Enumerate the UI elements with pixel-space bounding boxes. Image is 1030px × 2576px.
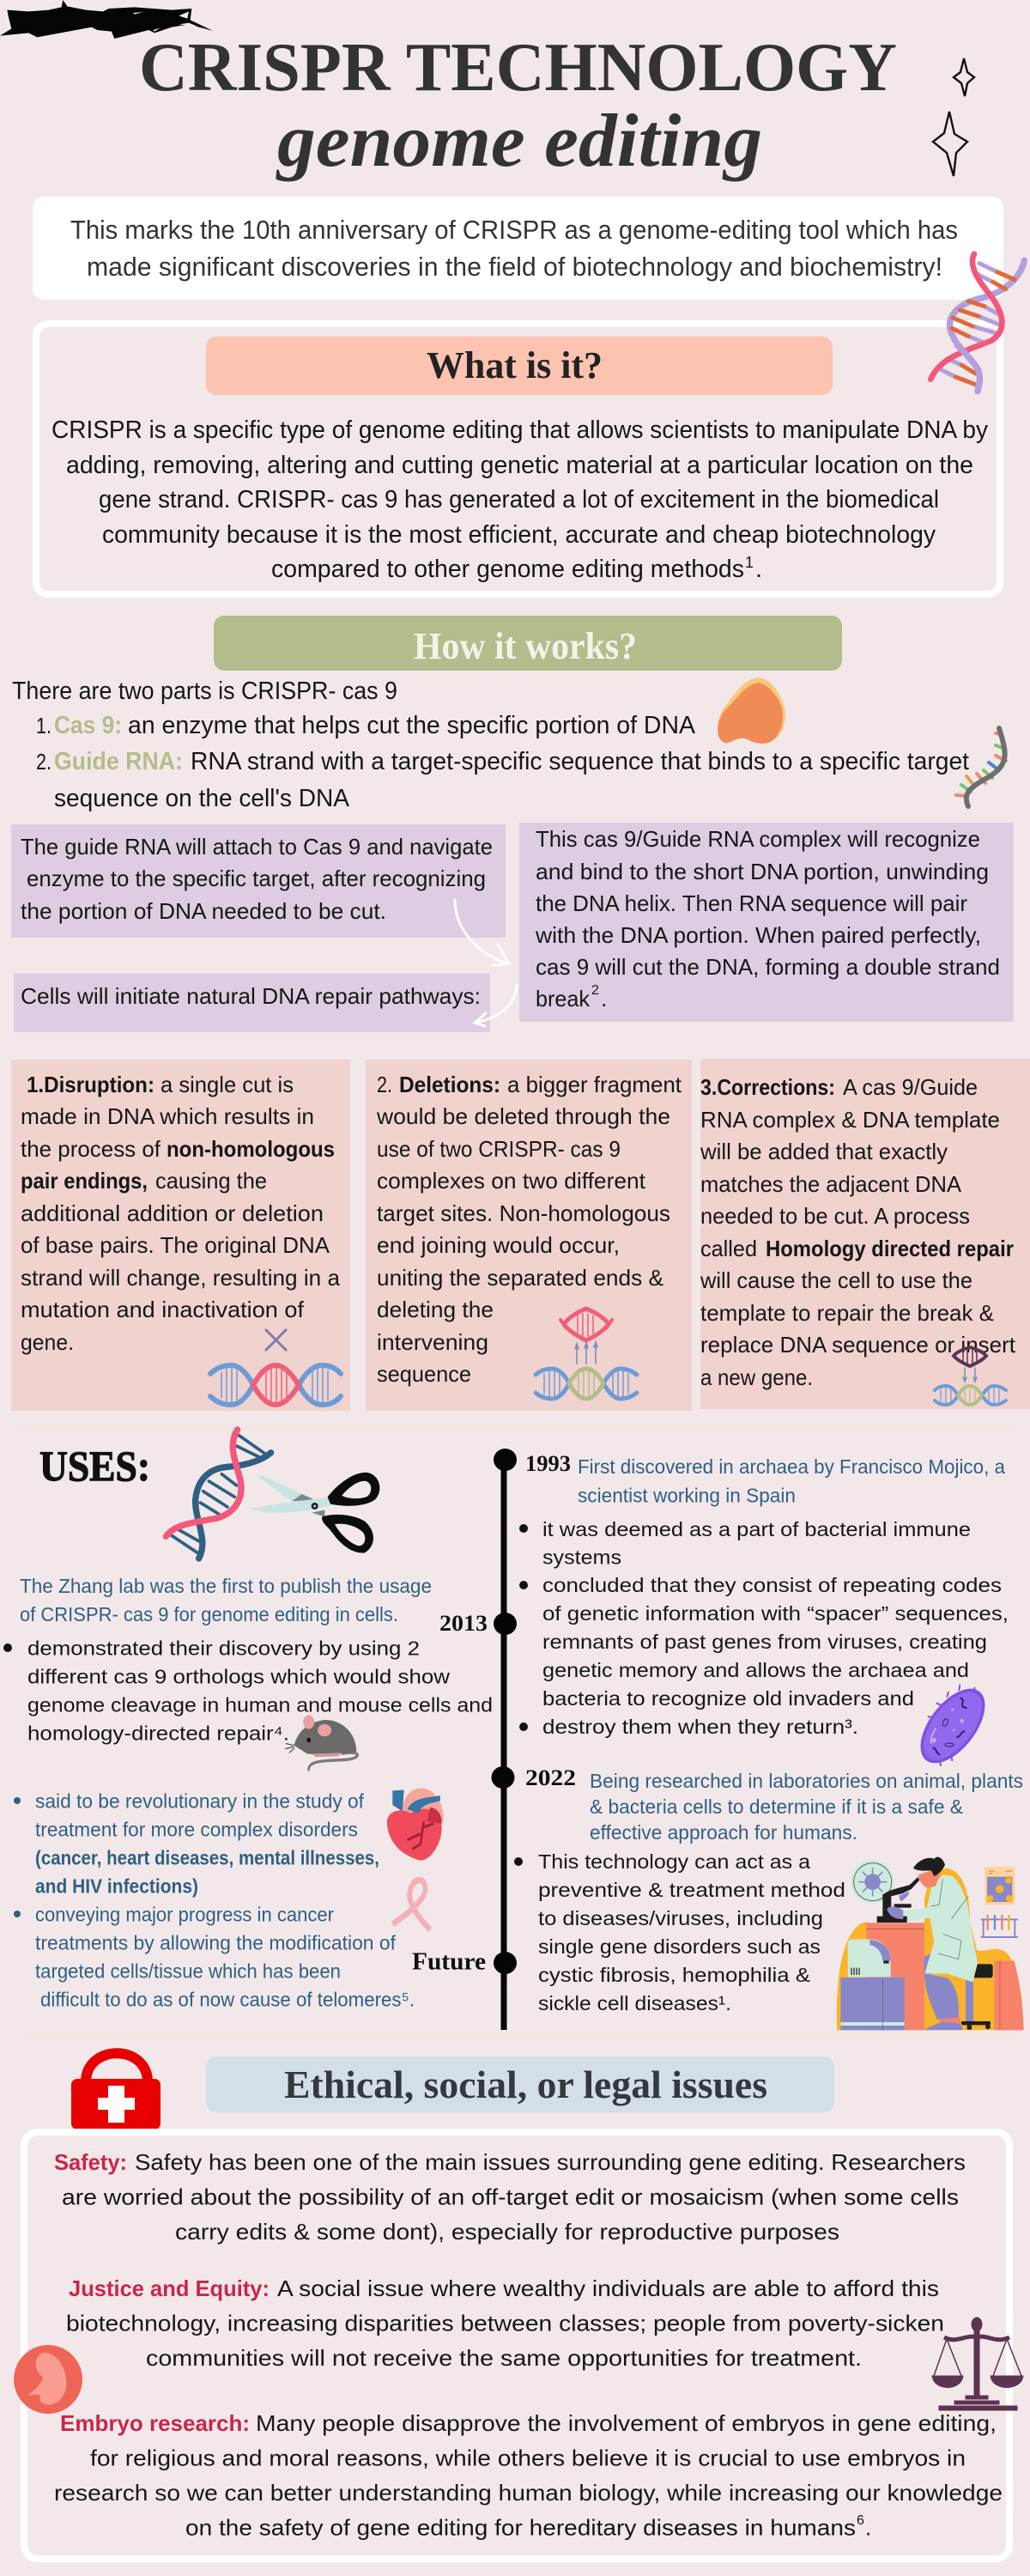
heading: how it works: How it works? xyxy=(414,625,637,667)
icon: Cas 9 enzyme blob xyxy=(718,677,785,744)
icon: scissors xyxy=(249,1473,379,1553)
text block: two parts: 2. xyxy=(36,749,52,775)
text block: disruption: strand will change, resulting in a xyxy=(21,1265,341,1291)
text block: 2022 bullet: single gene disorders such as xyxy=(538,1935,821,1958)
text block: embryo research: Embryo research: xyxy=(60,2410,250,2436)
text block: deletions: uniting the separated ends & xyxy=(377,1265,663,1291)
panel: deletions xyxy=(366,1060,692,1411)
text block: definition: CRISPR is a specific type of genome editing that allows scientists to manipulate DNA by xyxy=(52,416,988,444)
text block: complex disorders: (cancer, heart diseases, mental illnesses, xyxy=(35,1846,379,1868)
icon: mouse xyxy=(285,1715,358,1771)
text block: 1993 discovery: scientist working in Spain xyxy=(578,1484,796,1506)
icon: DNA fragment removal xyxy=(536,1309,637,1399)
text block: Zhang lab: The Zhang lab was the first to publish the usage xyxy=(20,1575,432,1597)
text block: definition: 1 xyxy=(745,554,754,571)
panel: complex recognition step: and bind to the short DNA portion, unwinding xyxy=(536,859,989,884)
text block: justice and equity: communities will not receive the same opportunities for treatment. xyxy=(146,2345,862,2371)
icon: DNA insertion xyxy=(935,1347,1006,1405)
text block: 2013 discovery xyxy=(3,1637,493,1745)
icon: heart xyxy=(387,1788,444,1861)
text block: disruption: made in DNA which results in xyxy=(21,1103,314,1129)
text block: safety xyxy=(54,2149,966,2245)
text block: disruption: pair endings, xyxy=(21,1168,148,1194)
label: future: Future xyxy=(412,1949,486,1975)
text block: corrections: matches the adjacent DNA xyxy=(700,1171,962,1197)
icon: scales of justice xyxy=(932,2318,1023,2410)
text block: two parts: 1. xyxy=(36,713,52,738)
text block: two parts: There are two parts is CRISPR- cas 9 xyxy=(12,677,397,705)
arrow: complex to repair xyxy=(475,985,517,1026)
text block: 2022 research: effective approach for humans. xyxy=(590,1821,857,1844)
panel: guide RNA step: enzyme to the specific target, after recognizing xyxy=(27,866,486,891)
text block: 1993 bullets: systems xyxy=(542,1546,621,1568)
text block: 2022 bullet xyxy=(514,1850,845,2014)
text block: embryo research: research so we can better understanding human biology, while increasing our knowledge xyxy=(54,2480,1003,2506)
text block: 2022 bullet: preventive & treatment method xyxy=(538,1879,845,1901)
icon: bacterium xyxy=(908,1678,997,1774)
text block: corrections: a new gene. xyxy=(700,1364,813,1390)
text block: 1993 bullets xyxy=(519,1518,1009,1738)
text block: two parts: Cas 9: xyxy=(54,712,122,739)
panel: repair pathways step xyxy=(14,974,490,1032)
icon: pink and purple DNA xyxy=(930,254,1024,392)
text block: 2022 bullet: sickle cell diseases¹. xyxy=(538,1992,731,2014)
text block: two parts: sequence on the cell's DNA xyxy=(54,785,350,812)
text block: definition: . xyxy=(755,556,762,583)
text block: deletions: Deletions: xyxy=(399,1072,500,1097)
panel: guide RNA step: the portion of DNA needed to be cut. xyxy=(21,898,386,924)
icon: DNA strand xyxy=(166,1430,271,1558)
panel: complex recognition step: the DNA helix. Then RNA sequence will pair xyxy=(536,890,967,916)
arrow: guide RNA to complex xyxy=(455,900,509,965)
text block: corrections: replace DNA sequence or insert xyxy=(700,1332,1016,1358)
text block: corrections: 3.Corrections: xyxy=(700,1074,835,1100)
text block: safety: Safety: xyxy=(54,2149,127,2175)
text block: 1993 discovery: First discovered in archaea by Francisco Mojico, a xyxy=(578,1455,1005,1478)
panel: complex recognition step xyxy=(519,823,1014,1022)
text block: corrections: needed to be cut. A process xyxy=(700,1203,970,1229)
panel: complex recognition step: with the DNA portion. When paired perfectly, xyxy=(535,922,981,948)
text block: 1993 bullets: it was deemed as a part of bacterial immune xyxy=(542,1518,971,1540)
title: CRISPR TECHNOLOGY xyxy=(139,30,897,106)
text block: complex disorders: said to be revolutionary in the study of xyxy=(35,1789,365,1812)
text block: deletions: intervening xyxy=(377,1329,488,1355)
text block: 2022 research xyxy=(590,1770,1023,1844)
text block: safety: Safety has been one of the main issues surrounding gene editing. Researchers xyxy=(135,2149,966,2175)
heading: uses: USES: xyxy=(39,1442,150,1490)
icon: awareness ribbon xyxy=(392,1880,430,1929)
text block: justice and equity: Justice and Equity: xyxy=(69,2275,270,2301)
panel: complex recognition step: break xyxy=(536,986,591,1012)
text block: definition: gene strand. CRISPR- cas 9 has generated a lot of excitement in the biomedical xyxy=(99,486,939,513)
text block: safety: are worried about the possibility of an off-target edit or mosaicism (when some cells xyxy=(62,2184,959,2210)
text block: deletions: use of two CRISPR- cas 9 xyxy=(377,1136,621,1162)
text block: definition: adding, removing, altering and cutting genetic material at a particular location on the xyxy=(66,452,973,479)
text block: deletions: deleting the xyxy=(377,1297,494,1322)
text block: justice and equity: A social issue where wealthy individuals are able to afford this xyxy=(277,2275,939,2301)
text block: disruption: the process of xyxy=(21,1136,161,1162)
panel: corrections xyxy=(700,1059,1030,1409)
panel: complex recognition step: This cas 9/Guide RNA complex will recognize xyxy=(536,826,980,852)
text block: deletions: 2. xyxy=(377,1072,392,1097)
text block: deletions xyxy=(376,1072,682,1387)
chart: timeline xyxy=(412,1449,576,2030)
text block: deletions: end joining would occur, xyxy=(377,1232,620,1258)
text block: definition: compared to other genome editing methods xyxy=(271,556,744,583)
text block: deletions: sequence xyxy=(377,1361,471,1387)
text block: 1993 discovery xyxy=(578,1455,1005,1506)
text block: disruption: of base pairs. The original DNA xyxy=(21,1232,330,1258)
panel: repair pathways step: Cells will initiate natural DNA repair pathways: xyxy=(21,983,481,1009)
text block: corrections: Homology directed repair xyxy=(766,1236,1014,1261)
text block: 2013 discovery: homology-directed repair⁴. xyxy=(27,1722,289,1745)
redacted scribble xyxy=(0,0,213,39)
text block: embryo research: 6 xyxy=(857,2513,864,2528)
text block: corrections xyxy=(700,1074,1016,1390)
text block: embryo research: for religious and moral reasons, while others believe it is crucial to use embryos in xyxy=(90,2445,966,2471)
intro callout xyxy=(33,197,1003,300)
heading: ethical issues xyxy=(206,2057,834,2112)
text block: 2022 bullet: cystic fibrosis, hemophilia & xyxy=(538,1964,810,1986)
text block: deletions: complexes on two different xyxy=(377,1168,646,1194)
text block: disruption: additional addition or deletion xyxy=(21,1200,324,1226)
text block: deletions: would be deleted through the xyxy=(376,1103,670,1129)
icon: first aid case xyxy=(71,2053,161,2129)
text block: definition xyxy=(52,416,988,583)
icon: DNA with pink segment xyxy=(210,1365,341,1405)
text block: disruption: causing the xyxy=(155,1168,267,1194)
panel: what is it xyxy=(36,324,1000,594)
panel: guide RNA step xyxy=(11,824,506,938)
text block: disruption: 1.Disruption: xyxy=(27,1072,154,1097)
text block: 1993 bullets: concluded that they consist of repeating codes xyxy=(542,1574,1002,1596)
text block: 1993 bullets: remnants of past genes from viruses, creating xyxy=(542,1631,987,1653)
text block: 1993 bullets: bacteria to recognize old invaders and xyxy=(542,1687,914,1710)
icon: embryo xyxy=(14,2345,82,2414)
text block: two parts: Guide RNA: xyxy=(54,748,183,775)
text block: complex disorders: and HIV infections) xyxy=(35,1875,198,1898)
icon: sparkles xyxy=(933,58,974,176)
text block: 2022 research: & bacteria cells to determine if it is a safe & xyxy=(590,1795,963,1818)
text block: complex disorders: difficult to do as of now cause of telomeres⁵. xyxy=(40,1989,415,2011)
heading: what is it xyxy=(206,337,833,395)
panel: complex recognition step: . xyxy=(601,986,607,1012)
text block: Zhang lab xyxy=(20,1575,432,1625)
heading: what is it: What is it? xyxy=(427,344,603,386)
text block: 1993 bullets: of genetic information with “spacer” sequences, xyxy=(542,1602,1009,1625)
text block: embryo research: Many people disapprove the involvement of embryos in gene editing, xyxy=(256,2410,997,2436)
label: 2013: 2013 xyxy=(439,1611,488,1636)
text block: complex disorders xyxy=(14,1789,415,2011)
heading: how it works xyxy=(214,616,842,671)
panel: complex recognition step: cas 9 will cut the DNA, forming a double strand xyxy=(536,954,1000,980)
heading: ethical issues: Ethical, social, or legal issues xyxy=(284,2063,767,2106)
illustration: scientist at microscope xyxy=(837,1857,1024,2030)
text block: corrections: RNA complex & DNA template xyxy=(700,1107,1000,1133)
panel: disruption xyxy=(11,1060,350,1411)
text block: 2022 bullet: This technology can act as a xyxy=(538,1850,810,1873)
text block: 2013 discovery: demonstrated their discovery by using 2 xyxy=(27,1637,420,1659)
text block: complex disorders: treatments by allowing the modification of xyxy=(35,1932,397,1954)
text block: disruption: a single cut is xyxy=(161,1072,294,1097)
text block: two parts: RNA strand with a target-specific sequence that binds to a specific target xyxy=(191,748,969,775)
text block: two parts xyxy=(12,677,969,812)
text block: 2022 bullet: to diseases/viruses, including xyxy=(538,1907,823,1929)
title: genome editing xyxy=(276,100,762,183)
text block: 1993 bullets: destroy them when they return³. xyxy=(542,1716,858,1738)
text block: disruption: non-homologous xyxy=(167,1136,335,1162)
panel: ethical issues xyxy=(24,2132,1009,2559)
intro callout: made significant discoveries in the field of biotechnology and biochemistry! xyxy=(87,252,942,282)
text block: corrections: will cause the cell to use the xyxy=(700,1267,972,1293)
icon: cut mark xyxy=(265,1329,287,1351)
text block: 1993 bullets: genetic memory and allows the archaea and xyxy=(542,1659,969,1681)
panel: guide RNA step: The guide RNA will attach to Cas 9 and navigate xyxy=(21,834,493,860)
panel: complex recognition step: 2 xyxy=(591,983,599,998)
text block: corrections: template to repair the break & xyxy=(700,1300,994,1326)
text block: corrections: A cas 9/Guide xyxy=(843,1074,978,1100)
text block: Zhang lab: of CRISPR- cas 9 for genome editing in cells. xyxy=(20,1603,398,1625)
text block: deletions: a bigger fragment xyxy=(507,1072,682,1097)
text block: embryo research: . xyxy=(865,2514,871,2540)
icon: RNA strand xyxy=(956,728,1006,806)
text block: 2013 discovery: genome cleavage in human and mouse cells and xyxy=(27,1693,493,1716)
text block: disruption: mutation and inactivation of xyxy=(21,1297,305,1322)
text block: definition: community because it is the most efficient, accurate and cheap biotechnology xyxy=(102,521,936,549)
title xyxy=(139,30,897,183)
intro callout: This marks the 10th anniversary of CRISPR as a genome-editing tool which has xyxy=(70,215,958,245)
text block: complex disorders: treatment for more complex disorders xyxy=(35,1819,358,1841)
text block: justice and equity: biotechnology, increasing disparities between classes; people from poverty-sicken xyxy=(66,2310,944,2336)
text block: complex disorders: conveying major progress in cancer xyxy=(35,1903,334,1925)
text block: disruption xyxy=(21,1072,341,1355)
text block: corrections: will be added that exactly xyxy=(700,1139,948,1164)
text block: deletions: target sites. Non-homologous xyxy=(377,1200,670,1226)
text block: complex disorders: targeted cells/tissue which has been xyxy=(35,1959,341,1982)
text block: 2013 discovery: different cas 9 orthologs which would show xyxy=(27,1666,450,1688)
text block: two parts: an enzyme that helps cut the specific portion of DNA xyxy=(128,712,696,739)
label: 1993: 1993 xyxy=(525,1451,571,1476)
text block: safety: carry edits & some dont), especially for reproductive purposes xyxy=(175,2219,839,2245)
text block: disruption: gene. xyxy=(21,1329,74,1355)
label: 2022: 2022 xyxy=(525,1765,576,1790)
text block: 2022 research: Being researched in laboratories on animal, plants xyxy=(590,1770,1023,1792)
text block: embryo research: on the safety of gene editing for hereditary diseases in humans xyxy=(185,2514,856,2540)
text block: justice and equity xyxy=(66,2275,944,2371)
text block: corrections: called xyxy=(700,1236,757,1261)
text block: embryo research xyxy=(54,2410,1003,2540)
